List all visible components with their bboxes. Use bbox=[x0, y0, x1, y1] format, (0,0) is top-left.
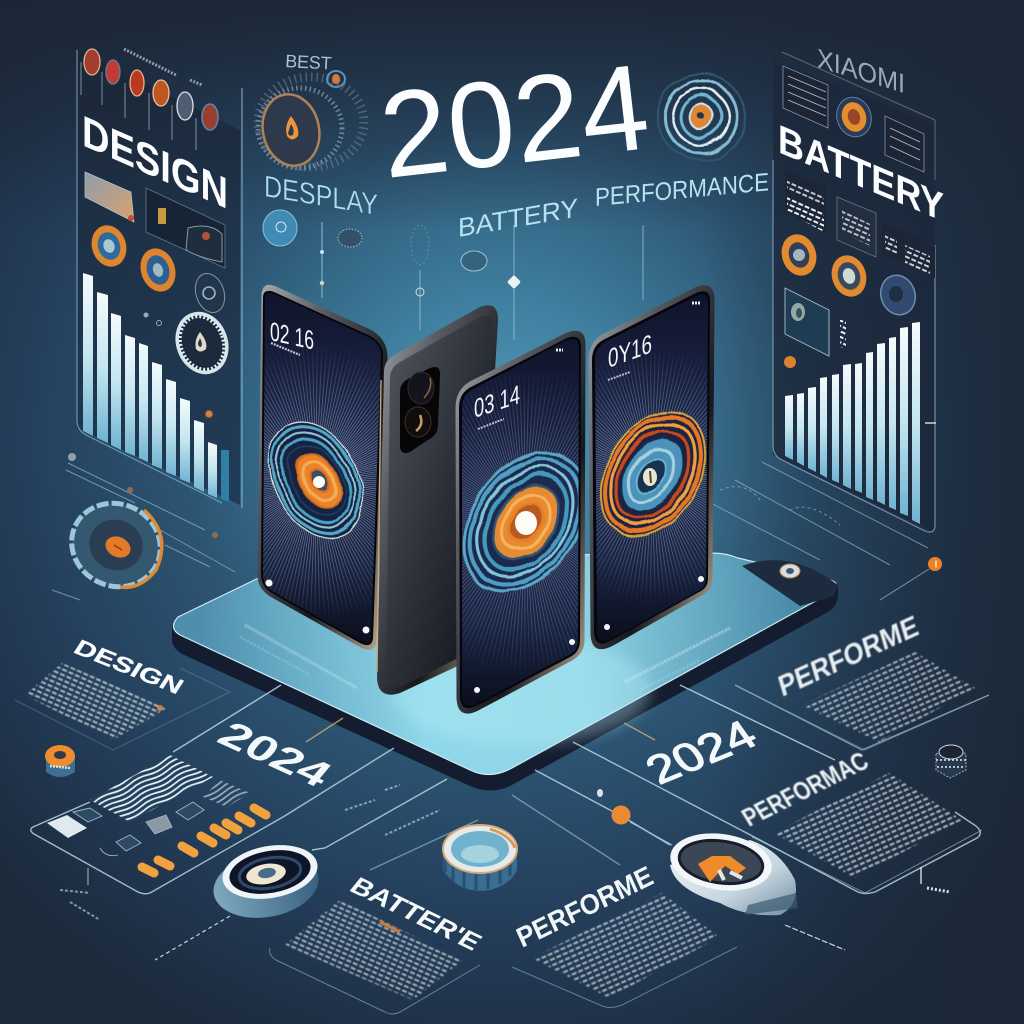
panel: design bbox=[77, 49, 242, 508]
design icon orange bbox=[86, 221, 229, 316]
panel: battery stats bbox=[47, 755, 266, 873]
text block bbox=[774, 773, 962, 878]
panel: performance bottom bbox=[512, 861, 737, 1008]
small floor marks bbox=[60, 785, 440, 920]
panel: battery note bbox=[270, 873, 487, 1014]
phone: right bbox=[588, 285, 714, 650]
heading: battery: BATTERY bbox=[778, 116, 944, 231]
icon: knob center right bbox=[667, 827, 845, 950]
phone clock right: 0Y16 bbox=[608, 329, 652, 374]
heading: BATTER'E bbox=[344, 873, 487, 956]
heading: design: DESIGN bbox=[82, 107, 228, 219]
mid thumbnails bbox=[785, 170, 935, 278]
icon: chip right bbox=[936, 745, 966, 778]
icon: small knob left bbox=[45, 745, 75, 777]
phone clock left: 02 16 bbox=[270, 317, 314, 356]
platform button bbox=[742, 560, 838, 606]
label: performance: PERFORMANCE bbox=[595, 169, 769, 212]
orange dot right bbox=[880, 557, 942, 600]
heading: PERFORME bbox=[775, 610, 922, 703]
icon: orange top bbox=[832, 93, 876, 141]
icon: display dial bbox=[256, 71, 364, 171]
text block bbox=[802, 652, 975, 742]
phone: back bbox=[377, 305, 498, 695]
panel: performance top right bbox=[735, 610, 989, 750]
wave pattern bbox=[90, 755, 213, 822]
icon: knob center left bbox=[155, 838, 324, 960]
label: best: BEST bbox=[285, 51, 333, 73]
label: 2024 right: 2024 bbox=[636, 712, 766, 793]
icon: dial left bbox=[58, 489, 174, 601]
title: 2024: 2024 bbox=[374, 38, 655, 204]
heading: PERFORME bbox=[512, 861, 658, 954]
icons: orange and blue bbox=[776, 230, 920, 319]
camera module bbox=[400, 367, 440, 453]
platform bbox=[172, 553, 838, 790]
label: display: DESPLAY bbox=[264, 168, 378, 222]
top thumbnails bbox=[783, 66, 924, 172]
connector lines lower right bbox=[512, 685, 989, 894]
panel: performance middle right bbox=[737, 747, 982, 893]
bar chart: battery bbox=[785, 322, 920, 524]
heading: DESIGN bbox=[69, 635, 188, 699]
phone: left bbox=[258, 284, 388, 650]
icon: ring center bbox=[443, 825, 517, 891]
phone: center bbox=[456, 330, 586, 714]
icon: display blue bbox=[263, 210, 362, 298]
label: battery: BATTERY bbox=[458, 194, 578, 243]
design thumbnails bbox=[85, 172, 225, 268]
text block bbox=[285, 900, 463, 1000]
text block bbox=[25, 663, 167, 740]
platform text bbox=[240, 625, 730, 690]
design dial bbox=[144, 307, 235, 418]
right lower schematic bbox=[705, 462, 928, 565]
icon: swirl top bbox=[646, 62, 756, 171]
left lower schematic bbox=[52, 453, 235, 600]
orange progress pills bbox=[142, 808, 266, 873]
text block bbox=[532, 893, 719, 998]
battery thumbnail bbox=[784, 288, 846, 368]
white square bbox=[47, 815, 87, 838]
bar chart: design bbox=[83, 273, 229, 502]
panel: battery bbox=[773, 52, 944, 533]
connector lines lower left bbox=[31, 685, 478, 894]
small central connectors bbox=[411, 225, 643, 340]
label: xiaomi: XIAOMI bbox=[817, 44, 905, 100]
heading: PERFORMAC bbox=[737, 747, 873, 832]
panel: design note bbox=[15, 635, 230, 750]
label: 2024 left: 2024 bbox=[209, 714, 341, 795]
top icon row bbox=[81, 49, 218, 150]
phone clock center: 03 14 bbox=[474, 380, 520, 424]
icon: orange dot bbox=[597, 789, 672, 845]
mini icons bbox=[73, 802, 204, 856]
